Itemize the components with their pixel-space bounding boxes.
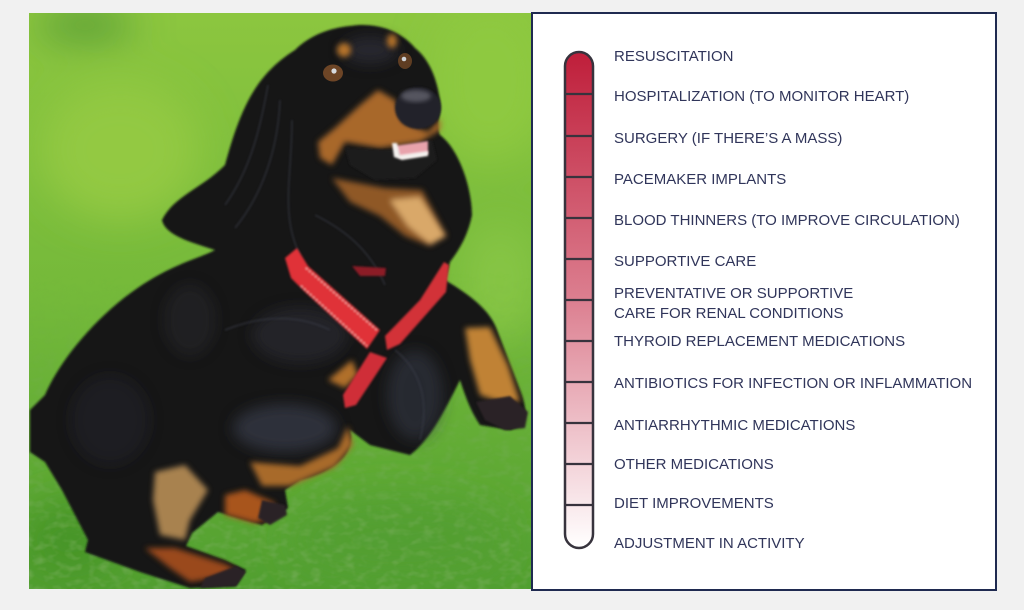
label: preventative care: PREVENTATIVE OR SUPPORTIVE	[614, 285, 853, 302]
label: antibiotics: ANTIBIOTICS FOR INFECTION OR INFLAMMATION	[614, 375, 972, 392]
thermometer scale	[564, 50, 594, 550]
dog tan markings	[145, 34, 520, 582]
dog face	[323, 53, 441, 180]
label: supportive care: SUPPORTIVE CARE	[614, 253, 756, 270]
label: hospitalization: HOSPITALIZATION (TO MONITOR HEART)	[614, 88, 909, 105]
dog body	[30, 25, 525, 588]
label: adjustment: ADJUSTMENT IN ACTIVITY	[614, 535, 805, 552]
panel: treatment scale	[531, 12, 997, 591]
label: thyroid: THYROID REPLACEMENT MEDICATIONS	[614, 333, 905, 350]
label: antiarrhythmic: ANTIARRHYTHMIC MEDICATIONS	[614, 417, 855, 434]
dog red harness	[285, 248, 449, 408]
ear and fur strands	[225, 85, 424, 440]
label: blood thinners: BLOOD THINNERS (TO IMPROVE CIRCULATION)	[614, 212, 960, 229]
label: diet: DIET IMPROVEMENTS	[614, 495, 774, 512]
label: preventative care: CARE FOR RENAL CONDITIONS	[614, 305, 843, 322]
label: other medications: OTHER MEDICATIONS	[614, 456, 774, 473]
label: resuscitation: RESUSCITATION	[614, 48, 733, 65]
photo: dachshund on grass	[29, 13, 531, 589]
label: pacemaker: PACEMAKER IMPLANTS	[614, 171, 786, 188]
label: preventative care	[614, 285, 853, 322]
dog paws	[200, 396, 528, 588]
label: surgery: SURGERY (IF THERE’S A MASS)	[614, 130, 842, 147]
